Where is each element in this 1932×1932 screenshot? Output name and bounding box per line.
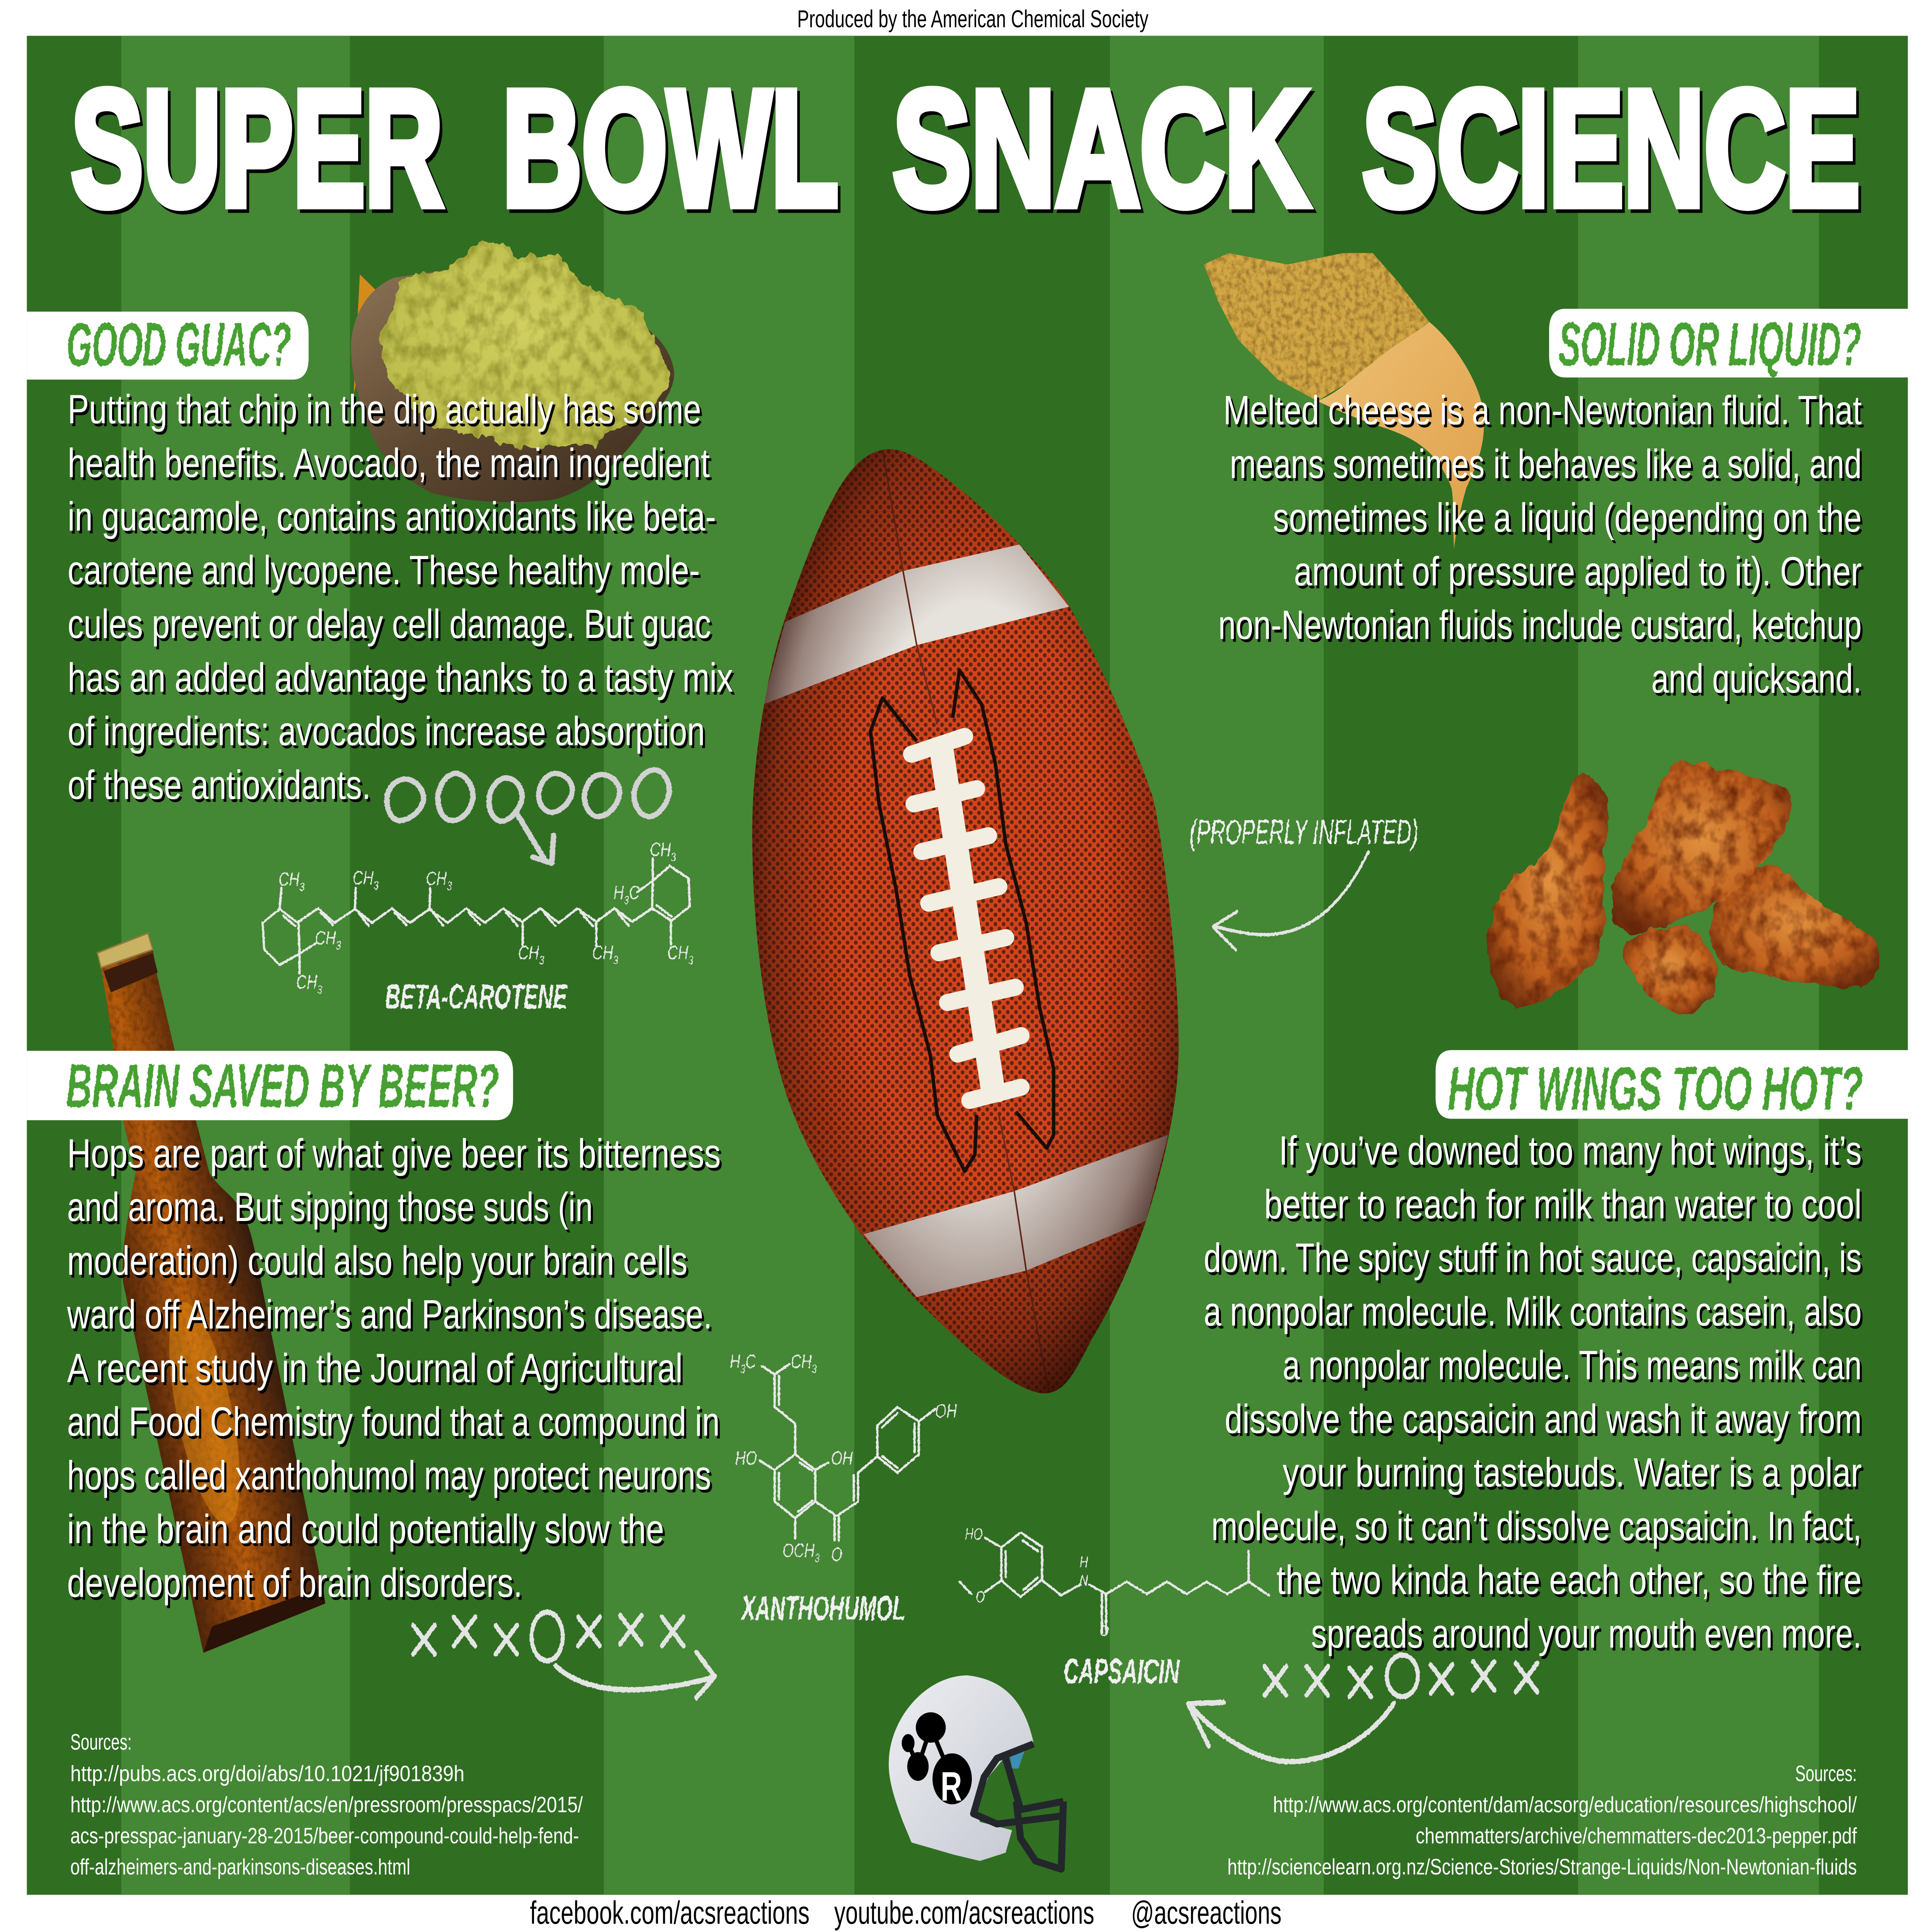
image: helmet xyxy=(889,1675,1063,1869)
bonds xyxy=(959,1532,1269,1633)
text block: brain saved by beer xyxy=(67,1131,721,1605)
text block: hot wings: a nonpolar molecule. Milk contains casein, also xyxy=(1204,1289,1862,1334)
molecule: beta-carotene: 3 xyxy=(317,983,322,996)
logo dots: R xyxy=(940,1764,962,1809)
molecule: xanthohumol: H xyxy=(730,1351,740,1372)
molecule: capsaicin: H xyxy=(1080,1553,1088,1571)
molecule: xanthohumol xyxy=(730,1351,957,1565)
chalk label: properly inflated: (PROPERLY INFLATED) xyxy=(1189,813,1418,851)
footer links: @acsreactions xyxy=(1131,1895,1282,1931)
bottom white stripe xyxy=(864,1135,1168,1297)
text block: hot wings: a nonpolar molecule. This means milk can xyxy=(1282,1342,1862,1388)
laces xyxy=(912,736,1021,1100)
text block: good guac xyxy=(68,386,733,808)
image: football xyxy=(752,449,1179,1393)
sources: left: http://pubs.acs.org/doi/abs/10.1021/jf901839h xyxy=(70,1761,464,1786)
text block: brain saved by beer: ward off Alzheimer’s and Parkinson’s disease. xyxy=(67,1292,712,1337)
image: beer bottle xyxy=(97,933,325,1653)
label: beta-carotene: BETA-CAROTENE xyxy=(385,978,568,1016)
sources: right xyxy=(1227,1761,1857,1879)
top white stripe xyxy=(763,544,1069,705)
molecule: beta-carotene: 3 xyxy=(374,879,379,892)
molecule: beta-carotene: CH xyxy=(592,942,613,964)
molecule: beta-carotene: CH xyxy=(426,868,447,889)
molecule: capsaicin: HO xyxy=(965,1525,983,1543)
molecule: xanthohumol: O xyxy=(831,1544,842,1565)
molecule: capsaicin: N xyxy=(1080,1571,1088,1589)
circle xyxy=(532,1612,563,1661)
text block: hot wings: dissolve the capsaicin and wash it away from xyxy=(1225,1396,1862,1442)
molecule: beta-carotene: CH xyxy=(650,839,671,861)
title xyxy=(71,56,1860,240)
molecule: xanthohumol: HO xyxy=(735,1448,757,1469)
molecule: xanthohumol: OCH xyxy=(782,1540,815,1561)
text block: hot wings: your burning tastebuds. Water is a polar xyxy=(1282,1450,1862,1495)
sources: left: http://www.acs.org/content/acs/en/pressroom/presspacs/2015/ xyxy=(70,1792,583,1817)
text block: good guac: carotene and lycopene. These healthy mole- xyxy=(68,548,700,593)
text block: hot wings xyxy=(1204,1128,1862,1656)
molecule: beta-carotene: 3 xyxy=(671,850,676,864)
arrow xyxy=(556,1652,715,1698)
text block: brain saved by beer: Hops are part of what give beer its bitterness xyxy=(67,1131,721,1176)
molecule: xanthohumol: 3 xyxy=(740,1362,746,1376)
text block: hot wings: spreads around your mouth even more. xyxy=(1311,1611,1862,1656)
chalk play: circles with arrow xyxy=(387,770,669,863)
text block: good guac: Putting that chip in the dip actually has some xyxy=(68,386,701,432)
footer links: facebook.com/acsreactions xyxy=(530,1895,810,1931)
text block: good guac: health benefits. Avocado, the main ingredient xyxy=(68,440,710,486)
text block: solid or liquid: and quicksand. xyxy=(1651,656,1862,701)
stitching xyxy=(871,670,1054,1171)
text block: solid or liquid: non-Newtonian fluids include custard, ketchup xyxy=(1218,602,1862,648)
section header: brain saved by beer: BRAIN SAVED BY BEER? xyxy=(66,1051,499,1120)
text block: brain saved by beer: in the brain and could potentially slow the xyxy=(67,1506,664,1552)
molecule: beta-carotene: 3 xyxy=(688,953,694,967)
text block: solid or liquid xyxy=(1218,388,1862,701)
crosses xyxy=(413,1616,684,1654)
text block: brain saved by beer: and Food Chemistry found that a compound in xyxy=(67,1399,719,1444)
text block: brain saved by beer: development of brain disorders. xyxy=(67,1560,522,1605)
molecule: beta-carotene: C xyxy=(629,882,640,903)
ball shading xyxy=(752,449,1179,1393)
sources: right: chemmatters/archive/chemmatters-dec2013-pepper.pdf xyxy=(1416,1823,1857,1848)
arrow: to football xyxy=(1213,852,1369,950)
molecule: xanthohumol: 3 xyxy=(812,1362,817,1376)
molecule: beta-carotene: CH xyxy=(296,971,317,993)
molecule: xanthohumol: OH xyxy=(831,1448,853,1469)
face mask xyxy=(974,1744,1063,1869)
text block: brain saved by beer: moderation) could also help your brain cells xyxy=(67,1238,687,1284)
label: capsaicin: CAPSAICIN xyxy=(1063,1652,1180,1690)
molecule: xanthohumol: OH xyxy=(935,1400,957,1422)
text block: solid or liquid: amount of pressure applied to it). Other xyxy=(1294,549,1862,594)
visor xyxy=(1010,1750,1025,1769)
text block: hot wings: down. The spicy stuff in hot sauce, capsaicin, is xyxy=(1204,1235,1862,1281)
text block: solid or liquid: Melted cheese is a non-Newtonian fluid. That xyxy=(1223,388,1862,433)
label: xanthohumol: XANTHOHUMOL xyxy=(740,1589,905,1628)
text block: brain saved by beer: hops called xanthohumol may protect neurons xyxy=(67,1453,711,1498)
text block: brain saved by beer: and aroma. But sipping those suds (in xyxy=(67,1184,593,1230)
sources: right: http://www.acs.org/content/dam/acsorg/education/resources/highschool/ xyxy=(1273,1792,1857,1817)
text block: hot wings: If you’ve downed too many hot wings, it’s xyxy=(1279,1128,1862,1173)
molecule: xanthohumol: 3 xyxy=(815,1551,820,1565)
molecule: capsaicin: O xyxy=(1100,1621,1109,1639)
chalk play: beer xyxy=(413,1612,715,1698)
molecule: beta-carotene: 3 xyxy=(613,953,618,967)
molecule: beta-carotene: 3 xyxy=(299,880,305,893)
title: SCIENCE xyxy=(1362,56,1860,240)
molecule: beta-carotene: 3 xyxy=(447,879,452,893)
molecule: beta-carotene: CH xyxy=(315,927,336,949)
wing: right xyxy=(1709,867,1881,988)
text block: hot wings: better to reach for milk than water to cool xyxy=(1264,1182,1862,1227)
title: BOWL xyxy=(502,56,838,240)
arrow xyxy=(1188,1702,1394,1762)
sources: right: Sources: xyxy=(1795,1761,1857,1786)
text block: good guac: of ingredients: avocados increase absorption xyxy=(68,709,705,754)
image: hot wings xyxy=(1487,762,1881,1014)
section header: good guac: GOOD GUAC? xyxy=(66,310,291,379)
title: SNACK xyxy=(893,56,1309,240)
logo dots xyxy=(902,1712,972,1809)
bonds xyxy=(760,1364,935,1541)
molecule: beta-carotene: CH xyxy=(353,867,374,889)
text block: good guac: has an added advantage thanks to a tasty mix xyxy=(68,655,733,700)
wing: left xyxy=(1487,777,1607,1007)
wing: large centre xyxy=(1612,762,1791,934)
text block: brain saved by beer: A recent study in the Journal of Agricultural xyxy=(67,1345,683,1391)
image: chip dipped in cheese xyxy=(1204,253,1484,549)
text block: good guac: in guacamole, contains antioxidants like beta- xyxy=(68,494,716,539)
image: guacamole bowl with chip xyxy=(351,245,674,502)
molecule: beta-carotene: CH xyxy=(518,942,539,964)
crosses xyxy=(1265,1662,1537,1697)
bonds xyxy=(263,858,690,973)
ball seam xyxy=(883,450,1048,1390)
text block: solid or liquid: means sometimes it behaves like a solid, and xyxy=(1230,441,1862,487)
text block: good guac: cules prevent or delay cell damage. But guac xyxy=(68,601,711,647)
molecule: beta-carotene: 3 xyxy=(336,939,341,952)
sources: right: http://sciencelearn.org.nz/Science-Stories/Strange-Liquids/Non-Newtonian-fluids xyxy=(1227,1854,1857,1879)
sources: left xyxy=(70,1730,583,1879)
circle xyxy=(1387,1655,1418,1697)
section header: good guac xyxy=(27,310,309,379)
molecule: xanthohumol: C xyxy=(745,1351,756,1372)
chalk play: hot wings xyxy=(1188,1655,1537,1762)
title: SUPER xyxy=(71,56,443,240)
wing: lower xyxy=(1623,927,1716,1014)
sources: left: acs-presspac-january-28-2015/beer-compound-could-help-fend- xyxy=(70,1823,579,1848)
sources: left: off-alzheimers-and-parkinsons-diseases.html xyxy=(70,1854,410,1879)
molecule: beta-carotene xyxy=(263,839,694,996)
footer links: youtube.com/acsreactions xyxy=(834,1895,1094,1931)
molecule: beta-carotene: H xyxy=(614,882,624,903)
text block: good guac: of these antioxidants. xyxy=(68,762,371,808)
sources: left: Sources: xyxy=(70,1730,132,1754)
molecule: beta-carotene: 3 xyxy=(624,893,629,907)
text block: hot wings: the two kinda hate each other, so the fire xyxy=(1276,1557,1862,1603)
text block: hot wings: molecule, so it can’t dissolve capsaicin. In fact, xyxy=(1211,1503,1862,1549)
molecule: capsaicin: O xyxy=(976,1588,985,1605)
shell xyxy=(889,1675,1034,1861)
molecule: xanthohumol: CH xyxy=(791,1351,812,1372)
credit line: Produced by the American Chemical Society xyxy=(797,5,1148,32)
molecule: capsaicin xyxy=(959,1525,1269,1639)
footer links xyxy=(530,1895,1282,1931)
molecule: beta-carotene: 3 xyxy=(539,953,544,967)
molecule: beta-carotene: CH xyxy=(279,869,299,890)
text block: solid or liquid: sometimes like a liquid (depending on the xyxy=(1273,495,1862,541)
molecule: beta-carotene: CH xyxy=(667,942,688,964)
